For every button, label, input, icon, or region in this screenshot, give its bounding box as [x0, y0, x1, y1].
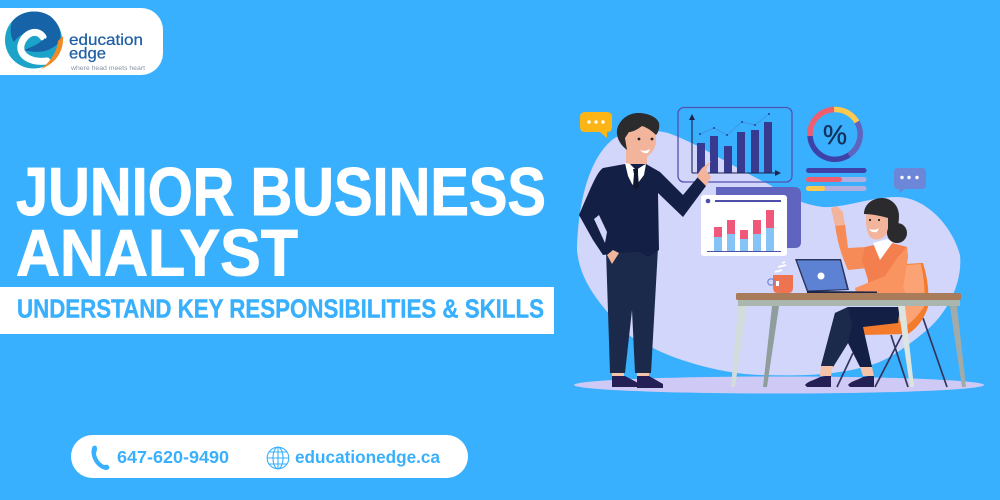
gap between arm and torso [594, 215, 607, 243]
jacket and arms [579, 164, 706, 257]
logo wordmark: education [69, 32, 143, 49]
shoes [805, 375, 831, 387]
website: educationedge.ca [295, 447, 440, 467]
trousers [606, 248, 658, 373]
logo wordmark: edge [69, 46, 106, 62]
subtitle banner [0, 287, 554, 334]
face [625, 122, 656, 158]
raised arm [835, 224, 868, 270]
desk back leg, chair and woman [805, 198, 947, 387]
neck [626, 148, 647, 170]
trousers [821, 307, 900, 367]
face [866, 213, 889, 240]
logo wordmark [69, 32, 143, 62]
contact pill [71, 435, 468, 478]
shirt and tie [625, 163, 646, 188]
title: JUNIOR BUSINESS [16, 154, 546, 230]
icon: phone [92, 446, 109, 470]
title [16, 154, 546, 290]
bun [887, 223, 907, 243]
hand in pocket [607, 250, 619, 264]
subtitle banner: UNDERSTAND KEY RESPONSIBILITIES & SKILLS [17, 294, 544, 324]
ankles and shoes [612, 373, 649, 377]
ankles [820, 366, 874, 376]
hair [617, 113, 659, 150]
illustration: analysts at work [574, 108, 984, 394]
pointing hand [697, 161, 711, 186]
chair legs [837, 318, 947, 387]
logo tagline: where head meets heart [70, 65, 145, 72]
donut percent chart [810, 109, 860, 159]
chair [863, 263, 928, 335]
mug with steam [768, 262, 793, 293]
sweater [862, 242, 908, 293]
raised hand [831, 206, 845, 226]
eyes and smile [638, 138, 640, 140]
icon: swirl logo [5, 11, 63, 69]
hair [864, 198, 899, 238]
line and bar chart panel [678, 108, 792, 182]
smile and eyes [869, 219, 871, 221]
desk [731, 293, 966, 387]
phone number: 647-620-9490 [117, 447, 229, 467]
progress bars [806, 168, 866, 191]
background blob [577, 130, 960, 375]
collar [873, 239, 893, 260]
laptop [795, 259, 877, 293]
ground shadow [574, 376, 984, 394]
dashboard card with stacked bars [701, 187, 801, 256]
man presenter [579, 113, 711, 388]
speech bubble: orange [580, 112, 612, 138]
speech bubble: blue [894, 168, 926, 193]
icon: globe [267, 447, 289, 469]
donut percent chart: % [823, 120, 847, 150]
logo badge [0, 8, 163, 75]
title: ANALYST [16, 216, 298, 290]
